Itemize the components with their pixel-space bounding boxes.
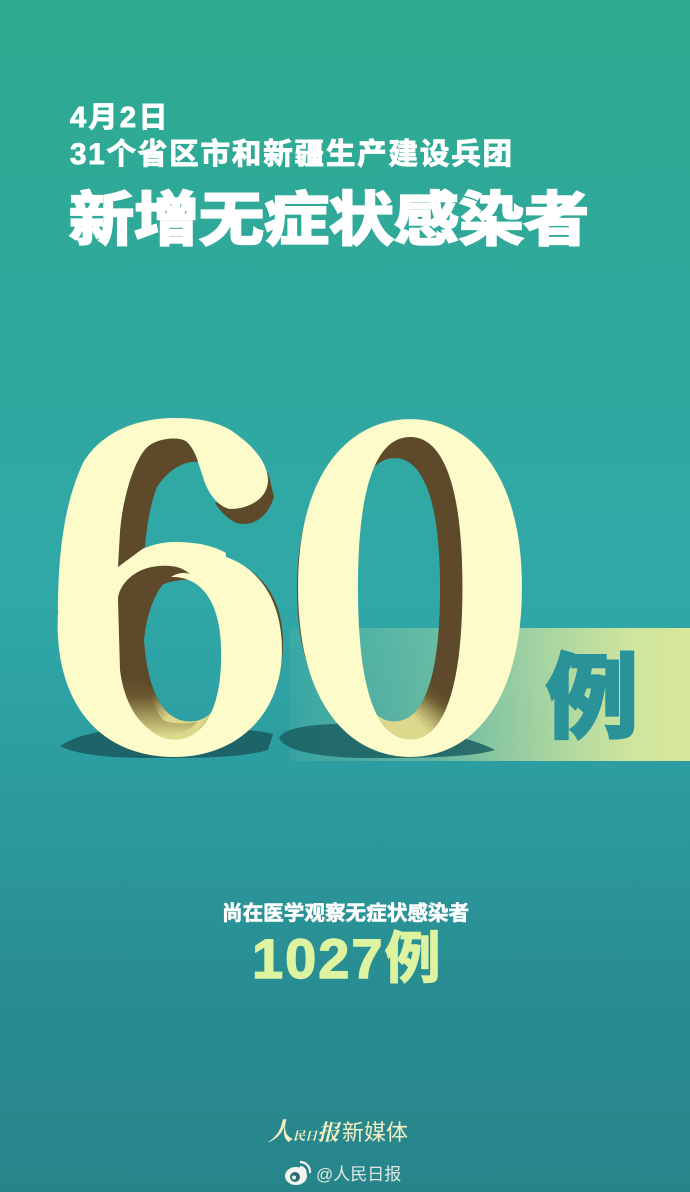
main title: 新增无症状感染者 (69, 187, 589, 252)
6 upper counter background (115, 412, 290, 572)
logo suffix: 新媒体 (342, 1120, 408, 1145)
numeral 60 front face: 6 (40, 251, 299, 873)
numeral 60 extrusion: 0 (281, 260, 532, 864)
numeral 60 extrusion: 0 (281, 288, 512, 843)
numeral 60 extrusion: 0 (282, 296, 507, 838)
6 stem and ball terminal (58, 418, 268, 620)
heading block (68, 102, 589, 252)
date line: 4月2日 (70, 102, 170, 134)
numeral 60 extrusion: 6 (62, 282, 298, 849)
numeral 60 extrusion: 6 (67, 288, 298, 843)
region line: 31个省区市和新疆生产建设兵团 (70, 138, 514, 171)
6 terminal shadow (215, 472, 274, 524)
shadow under 6 (60, 728, 273, 758)
numeral 60 extrusion: 6 (72, 296, 298, 838)
numeral 60 extrusion: 6 (42, 254, 299, 870)
numeral 60 front face (40, 251, 540, 873)
6 upper inner wall (118, 438, 198, 567)
numeral 60 extrusion: 6 (52, 268, 299, 859)
logo calligraphy: 人民日报 (267, 1119, 344, 1146)
numeral 60 extrusion: 6 (47, 260, 299, 864)
watermark (285, 1160, 401, 1185)
numeral 60 front face: 0 (280, 251, 540, 873)
6 lower inner wall (118, 566, 197, 735)
icon: weibo (285, 1160, 312, 1185)
unit 例: 例 (546, 624, 638, 757)
cumulative label: 尚在医学观察无症状感染者 (222, 902, 469, 925)
numeral 60 extrusion (42, 254, 537, 870)
cumulative number: 1027例 (252, 927, 443, 990)
6 bowl shoulder (116, 542, 226, 600)
numeral 60 extrusion: 0 (281, 274, 522, 854)
numeral 60 extrusion: 0 (280, 254, 537, 870)
numeral 60 extrusion: 6 (57, 274, 299, 854)
highlight band (290, 628, 690, 761)
media logo (267, 1119, 408, 1146)
numeral 60 extrusion: 0 (281, 268, 527, 859)
numeral 60 extrusion: 0 (281, 282, 517, 849)
weibo handle: @人民日报 (316, 1165, 401, 1184)
shadow under 0 (279, 724, 495, 758)
